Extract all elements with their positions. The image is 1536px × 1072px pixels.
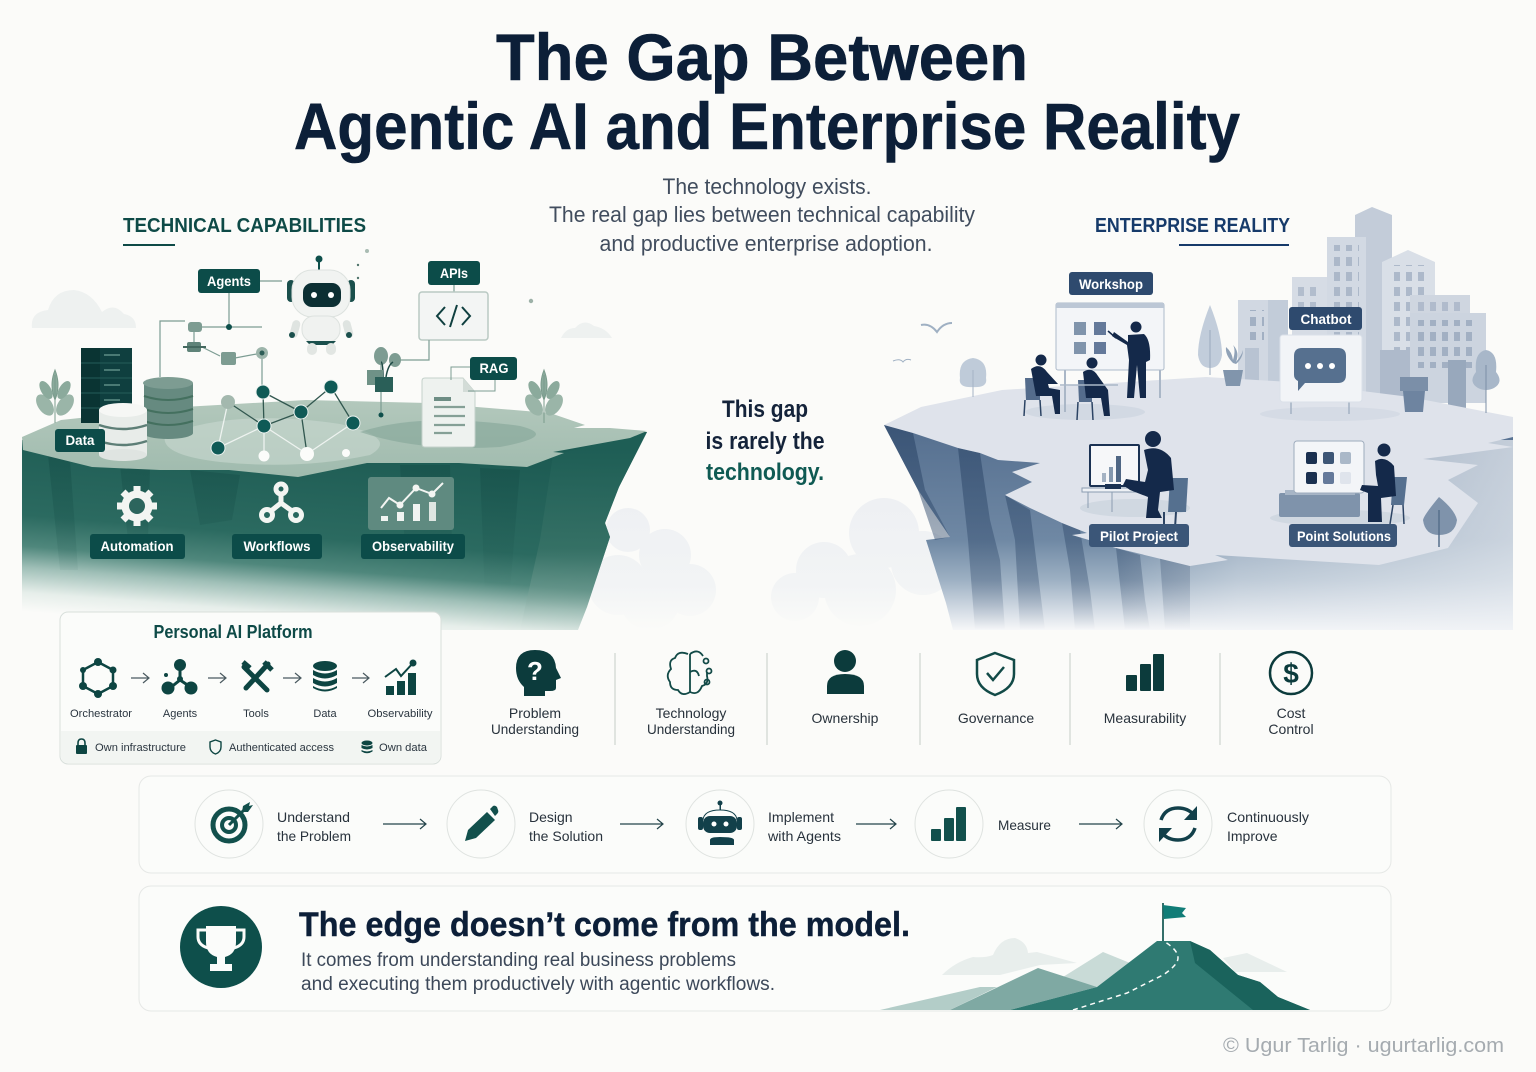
icon: data	[313, 661, 337, 692]
figure: point solutions kiosk	[1279, 441, 1407, 524]
cliff body	[22, 432, 647, 630]
figure: seated audience left	[1024, 354, 1060, 416]
arrow	[856, 819, 896, 829]
label: Point Solutions: Point Solutions	[1297, 528, 1391, 544]
label: Workflows: Workflows	[244, 538, 311, 554]
own infrastructure: Own infrastructure	[95, 742, 186, 754]
icon: robot	[287, 249, 533, 355]
icon: large pot	[1400, 377, 1428, 412]
top surface shading	[165, 418, 380, 465]
right cliff face	[520, 432, 647, 630]
label: Pilot Project	[1089, 524, 1189, 547]
arrow	[131, 673, 149, 683]
center statement: technology.	[706, 459, 824, 486]
title: The Gap Between	[496, 20, 1028, 94]
panel: technical capabilities cliff	[22, 249, 647, 630]
icon: gear	[117, 486, 157, 526]
icon: workflow	[262, 484, 302, 520]
ownership text: Ownership	[812, 710, 879, 726]
step: continuously improve: Continuously	[1227, 809, 1309, 825]
icon: observability	[385, 660, 416, 695]
arrow	[283, 673, 301, 683]
platform labels: Observability	[368, 708, 433, 720]
icon: chatbot sign	[1280, 335, 1362, 414]
label: Pilot Project: Pilot Project	[1100, 528, 1178, 544]
top surface shading	[1025, 404, 1410, 526]
icon: measurability	[1126, 654, 1164, 691]
subtitle: The technology exists.	[662, 174, 872, 199]
figure: seated audience right	[1060, 358, 1118, 420]
label: Observability	[361, 534, 465, 559]
step: implement with agents	[686, 790, 841, 858]
label: RAG: RAG	[480, 360, 509, 376]
technology understanding text: Technology	[656, 705, 726, 721]
panel: enterprise reality cliff	[884, 207, 1513, 630]
label: Agents: Agents	[207, 273, 251, 289]
problem understanding text: Problem	[509, 705, 561, 721]
icon: potted plant	[1223, 345, 1243, 386]
arrow	[383, 819, 426, 829]
technology understanding text	[647, 705, 735, 737]
icon: problem understanding: ?	[527, 656, 543, 686]
icon: API code window	[419, 292, 488, 340]
footer credit: © Ugur Tarlig · ugurtarlig.com	[1223, 1035, 1504, 1057]
subtitle	[549, 174, 975, 256]
platform labels	[70, 708, 433, 720]
icon: left plant	[32, 370, 78, 423]
panel: process steps	[139, 776, 1391, 873]
icon: ownership	[827, 650, 864, 694]
platform labels: Tools	[243, 708, 269, 720]
icon: birds	[893, 323, 952, 362]
cliff strata	[884, 425, 1190, 630]
cliff body	[884, 425, 1513, 630]
icon: server rack	[81, 348, 132, 423]
closing body: It comes from understanding real business problems	[301, 950, 736, 971]
icon: right plant	[521, 370, 567, 423]
platform labels: Agents	[163, 708, 198, 720]
icon: small plant	[367, 347, 401, 418]
panel: personal AI platform	[60, 612, 441, 764]
icon: lock	[76, 739, 87, 754]
icon: mini database	[362, 740, 372, 753]
subtitle: The real gap lies between technical capability	[549, 202, 975, 227]
arrow	[620, 819, 663, 829]
skyline	[1238, 207, 1486, 408]
step: measure: Measure	[998, 817, 1051, 833]
arrow	[1079, 819, 1122, 829]
platform labels: Data	[313, 708, 337, 720]
icon: governance	[977, 653, 1014, 695]
label: Observability: Observability	[372, 538, 454, 554]
label: Data	[55, 429, 105, 452]
label: Automation: Automation	[100, 538, 174, 554]
closing body: and executing them productively with agentic workflows.	[301, 974, 775, 995]
measurability text: Measurability	[1104, 710, 1186, 726]
icon: observability chart	[368, 477, 454, 530]
icon: small cloud	[561, 322, 612, 338]
label: Workflows	[232, 534, 322, 559]
arrow	[352, 673, 369, 683]
icon: tree near solutions	[1423, 497, 1457, 547]
icon: white database	[99, 403, 147, 461]
panel: closing message	[139, 886, 1391, 1011]
step: implement with agents: with Agents	[767, 828, 841, 844]
step: design the solution	[447, 790, 603, 858]
figure: presenter	[1108, 322, 1150, 398]
platform labels: Orchestrator	[70, 708, 132, 720]
icon: technology understanding	[668, 651, 712, 694]
cliff strata	[48, 455, 520, 600]
heading: enterprise reality: ENTERPRISE REALITY	[1095, 215, 1291, 237]
icon: tree tall	[1198, 305, 1222, 375]
icon: grey database	[143, 377, 193, 439]
label: RAG	[470, 357, 517, 380]
cliff right fade	[1110, 440, 1513, 630]
gap clouds	[588, 498, 955, 630]
step: continuously improve: Improve	[1227, 828, 1278, 844]
subtitle: and productive enterprise adoption.	[600, 231, 932, 256]
label: Workshop: Workshop	[1079, 276, 1143, 292]
figure: pilot project desk	[1082, 431, 1188, 528]
circuit connectors	[160, 281, 454, 415]
center statement: is rarely the	[706, 428, 824, 455]
icon: shield	[210, 740, 221, 754]
governance text: Governance	[958, 710, 1034, 726]
cost control text: Control	[1268, 721, 1314, 737]
center statement: This gap	[722, 396, 808, 423]
own data: Own data	[379, 742, 428, 754]
closing headline: The edge doesn’t come from the model.	[299, 906, 910, 944]
icon: tree right	[1472, 350, 1500, 413]
icon: trophy	[180, 906, 262, 988]
problem understanding text: Understanding	[491, 721, 579, 737]
factors row	[491, 650, 1314, 745]
title	[294, 20, 1240, 163]
authenticated access: Authenticated access	[229, 742, 334, 754]
step: understand the problem: Understand	[277, 809, 350, 825]
platform heading: Personal AI Platform	[154, 622, 312, 642]
label: Workshop	[1069, 272, 1153, 295]
step: design the solution: the Solution	[529, 828, 603, 844]
label: Agents	[198, 269, 260, 293]
icon: problem understanding	[516, 650, 561, 696]
title: Agentic AI and Enterprise Reality	[294, 89, 1240, 163]
cliff top surface	[884, 377, 1513, 566]
circuit nodes	[183, 322, 268, 365]
icon: tools	[243, 662, 272, 690]
icon: tree left	[960, 358, 986, 397]
cost control text: Cost	[1277, 705, 1305, 721]
icon: left cloud	[32, 290, 136, 328]
label: APIs: APIs	[440, 265, 468, 281]
icon: workshop whiteboard	[1056, 303, 1164, 412]
problem understanding text	[491, 705, 579, 737]
step: design the solution: Design	[529, 809, 573, 825]
heading: technical capabilities: TECHNICAL CAPABILITIES	[123, 215, 366, 237]
step: understand the problem	[195, 790, 351, 858]
label: APIs	[428, 261, 480, 285]
icon: orchestrator	[79, 658, 117, 698]
closing body	[301, 950, 775, 995]
cliff top surface	[22, 400, 647, 477]
label: Chatbot: Chatbot	[1300, 311, 1352, 327]
technology understanding text: Understanding	[647, 721, 735, 737]
step: implement with agents: Implement	[768, 809, 834, 825]
icon: cost control: $	[1283, 658, 1299, 689]
icon: document	[422, 367, 495, 447]
network graph	[211, 380, 360, 462]
label: Automation	[90, 534, 185, 559]
step: measure	[915, 790, 1051, 858]
factor dividers	[615, 653, 1220, 745]
center statement	[706, 396, 824, 486]
arrow	[208, 673, 226, 683]
cost control text	[1268, 705, 1314, 737]
connector: API to plant	[428, 340, 430, 358]
label: Chatbot	[1289, 307, 1362, 330]
label: Point Solutions	[1289, 524, 1397, 547]
label: Data: Data	[66, 432, 95, 448]
illustration: mountain with flag	[880, 903, 1310, 1010]
step: continuously improve	[1144, 790, 1309, 858]
icon: agents	[162, 659, 198, 694]
step: understand the problem: the Problem	[277, 828, 351, 844]
icon: cost control	[1270, 652, 1312, 694]
